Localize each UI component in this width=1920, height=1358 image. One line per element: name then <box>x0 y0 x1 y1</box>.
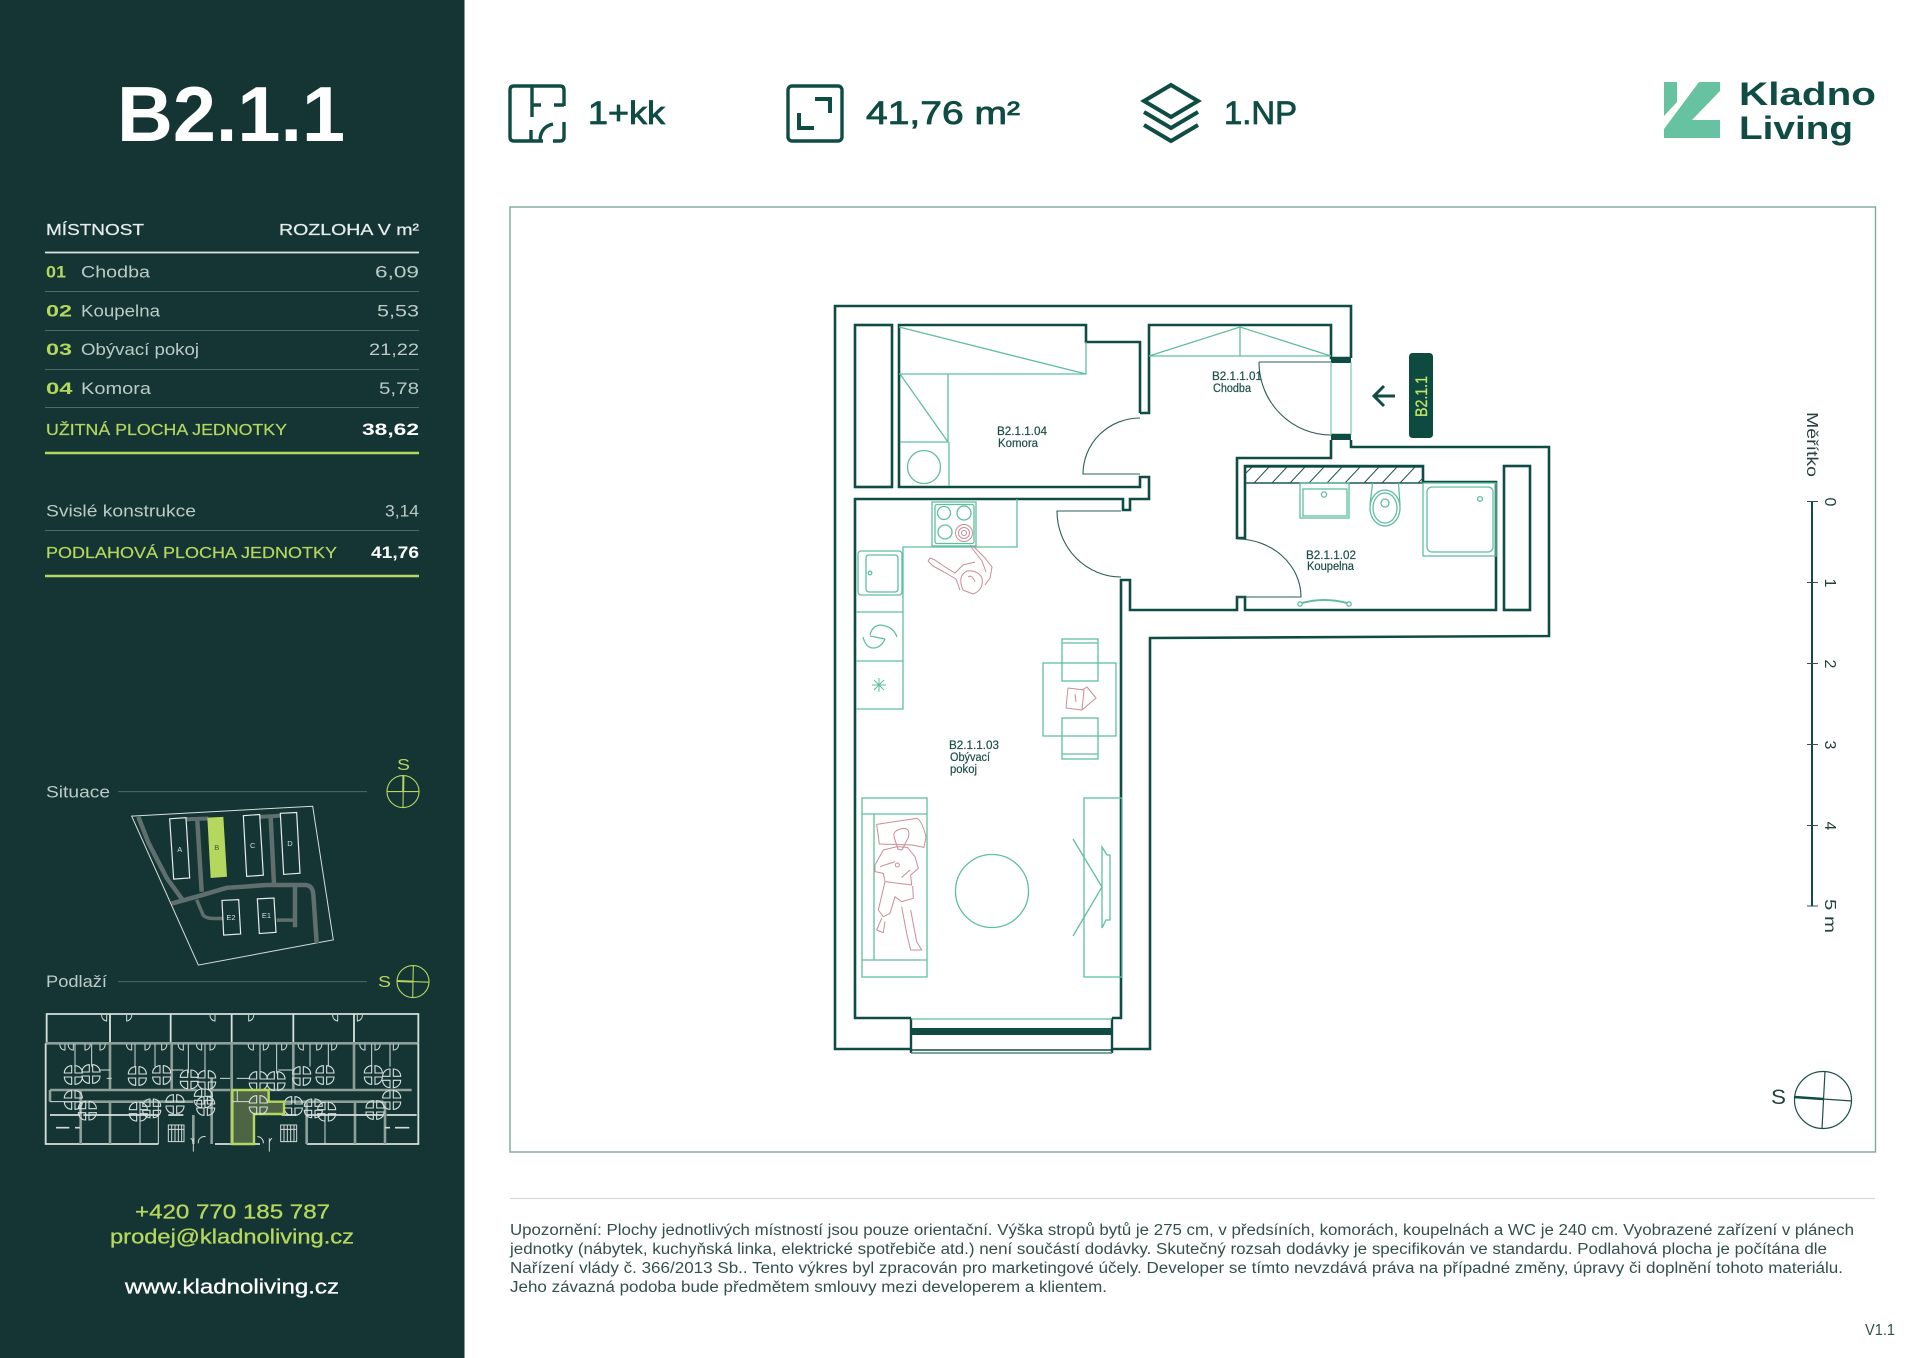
table: room areas: 41,76 <box>371 543 419 562</box>
disclaimer: Nařízení vlády č. 366/2013 Sb.. Tento výkres byl zpracován pro marketingové účely. Developer se tímto nevzdává práva na případné změny, úpravy či doplnění tohoto materiálu. <box>510 1260 1843 1277</box>
site plan map: D <box>287 839 293 848</box>
site plan map: A <box>177 845 182 854</box>
icon: site compass <box>387 757 419 808</box>
icon: site compass: S <box>397 757 410 774</box>
room labels: pokoj <box>950 764 977 776</box>
table: room areas: 03 <box>46 340 72 359</box>
contact details: prodej@kladnoliving.cz <box>110 1226 354 1248</box>
site plan map: E1 <box>262 911 271 920</box>
table: room areas: 5,53 <box>377 301 419 320</box>
table: room areas: 38,62 <box>362 420 419 439</box>
scale bar: 5 m <box>1821 899 1838 933</box>
site plan map: B <box>214 843 219 852</box>
logo: Kladno Living <box>1664 76 1876 146</box>
table: room areas <box>45 220 420 576</box>
disclaimer: jednotky (nábytek, kuchyňská linka, elektrické spotřebiče atd.) není součástí dodávky. Skutečný rozsah dodávky je specifikován ve standardu. Podlahová plocha je počítána dle <box>509 1241 1827 1258</box>
entrance tag <box>1409 353 1433 438</box>
table: room areas: Koupelna <box>81 301 161 320</box>
person cooking <box>928 545 992 594</box>
scale bar: 4 <box>1821 822 1838 831</box>
disclaimer: Jeho závazná podoba bude předmětem smlouvy mezi developerem a klientem. <box>510 1279 1107 1296</box>
icon: floor plan <box>510 86 564 141</box>
furniture: wardrobe <box>1149 326 1331 356</box>
arrow: entrance <box>1374 386 1395 406</box>
table: room areas: Komora <box>81 379 152 398</box>
header: area <box>788 86 1020 141</box>
scale bar <box>1803 412 1838 933</box>
door swings <box>1057 362 1331 597</box>
shaft hatching <box>1245 467 1423 483</box>
sofa bed <box>862 798 927 977</box>
title: unit code: B2.1.1 <box>117 70 345 158</box>
table: room areas: 04 <box>46 379 73 398</box>
items on table <box>1066 687 1096 710</box>
icon: floor compass <box>378 966 429 998</box>
site plan map: E2 <box>226 913 236 922</box>
room labels <box>949 371 1356 776</box>
contact details: www.kladnoliving.cz <box>124 1276 339 1298</box>
header: layout type <box>510 86 666 141</box>
heading: floor plan: Podlaží <box>46 972 107 991</box>
scale bar: Měřítko <box>1803 412 1820 477</box>
room labels: B2.1.1.02 <box>1306 550 1356 562</box>
room labels: B2.1.1.01 <box>1212 371 1262 383</box>
table: room areas: PODLAHOVÁ PLOCHA JEDNOTKY <box>46 543 337 562</box>
table: room areas: 01 <box>46 263 66 282</box>
scale bar: 3 <box>1821 741 1838 750</box>
site plan map: C <box>250 841 256 850</box>
room labels: Obývací <box>950 752 991 764</box>
room labels: B2.1.1.03 <box>949 740 999 752</box>
window <box>911 1018 1112 1053</box>
scale bar: 1 <box>1821 579 1838 588</box>
dining table with chairs <box>1043 639 1116 759</box>
room labels: Chodba <box>1213 383 1252 395</box>
icon: area frame <box>788 86 842 141</box>
table: room areas: Svislé konstrukce <box>46 501 196 520</box>
entrance door blocks <box>1331 358 1351 440</box>
scale bar: 2 <box>1821 660 1838 669</box>
heading: site plan: Situace <box>46 782 110 802</box>
table: room areas: 5,78 <box>379 379 419 398</box>
panel: plan frame <box>510 207 1876 1152</box>
furniture: storage shelves <box>899 327 1086 486</box>
logo: Kladno Living: Kladno <box>1739 76 1876 112</box>
icon: layers <box>1144 85 1198 141</box>
header: floor: 1.NP <box>1224 95 1297 131</box>
floor plan mini map <box>46 1014 418 1152</box>
TV unit <box>1073 798 1122 977</box>
entrance tag: B2.1.1 <box>1412 376 1431 417</box>
header: area: 41,76 m² <box>866 95 1020 131</box>
room labels: Koupelna <box>1307 561 1355 573</box>
person on bed <box>875 818 926 950</box>
site plan map <box>132 806 333 965</box>
icon: floor compass: S <box>378 974 391 991</box>
table: room areas: Obývací pokoj <box>81 340 199 359</box>
disclaimer <box>509 1198 1875 1296</box>
room labels: Komora <box>998 438 1039 450</box>
icon: north compass <box>1771 1071 1852 1129</box>
kitchen counter and appliances <box>856 499 1017 709</box>
floor plan of the unit <box>835 306 1549 1053</box>
highlighted unit <box>232 1090 284 1144</box>
table: room areas: 6,09 <box>375 263 419 282</box>
bathroom fixtures <box>1298 483 1496 606</box>
panel: left sidebar <box>0 0 464 1358</box>
room labels: B2.1.1.04 <box>997 426 1048 438</box>
table: room areas: UŽITNÁ PLOCHA JEDNOTKY <box>46 420 287 439</box>
table: room areas: 02 <box>46 301 72 320</box>
round rug <box>956 854 1028 928</box>
disclaimer: Upozornění: Plochy jednotlivých místností jsou pouze orientační. Výška stropů bytů je 275 cm, v předsíních, komorách, koupelnách a WC je 240 cm. Vyobrazené zařízení v plánech <box>510 1222 1854 1239</box>
contact details: +420 770 185 787 <box>135 1202 330 1224</box>
contact details <box>110 1202 354 1298</box>
scale bar: 0 <box>1821 498 1838 507</box>
header: layout type: 1+kk <box>588 95 666 131</box>
pink pan on hob <box>956 524 972 542</box>
table: room areas: ROZLOHA V m² <box>279 222 420 239</box>
icon: north compass: S <box>1771 1086 1786 1109</box>
table: room areas: MÍSTNOST <box>46 220 144 239</box>
header: floor <box>1144 85 1297 141</box>
table: room areas: 21,22 <box>369 340 419 359</box>
table: room areas: Chodba <box>81 263 151 282</box>
walls <box>835 306 1549 1049</box>
version label: V1.1 <box>1865 1322 1895 1339</box>
table: room areas: 3,14 <box>385 501 419 520</box>
logo: Kladno Living: Living <box>1739 110 1853 146</box>
furniture: entrance frame <box>1331 362 1351 435</box>
